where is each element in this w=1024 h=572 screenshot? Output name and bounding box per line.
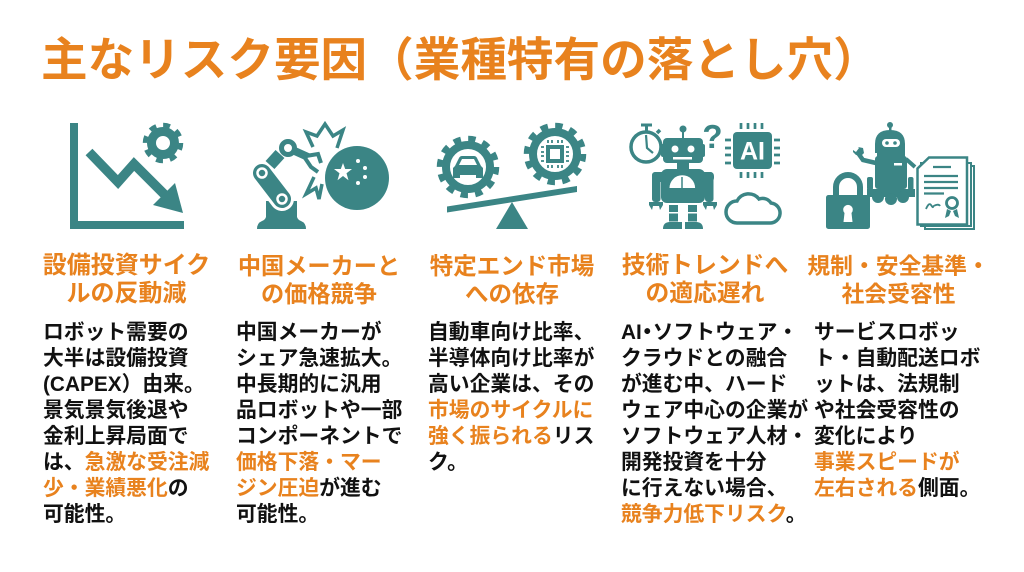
heading: end market dependence (430, 252, 594, 306)
text: capex cycle: 可能性。 (43, 503, 126, 526)
heading: tech trends (622, 252, 788, 306)
text: tech trends: AI・ソフトウェア・ (621, 321, 798, 344)
heading: China makers: の価格競争 (261, 280, 377, 306)
text: end market dependence (428, 320, 594, 474)
text: end market dependence: 高い企業は、その (428, 373, 594, 396)
icon: seesaw with car and chip gears (440, 126, 584, 229)
text: tech trends: 開発投資を十分 (621, 451, 767, 474)
text: regulation: ットは、法規制 (814, 373, 960, 396)
text: capex cycle: ロボット需要の (43, 321, 189, 344)
text: tech trends: クラウドとの融合 (621, 347, 787, 370)
text: regulation: 左右される側面。 (814, 477, 980, 500)
text: capex cycle: は、急激な受注減 (43, 451, 209, 474)
text: regulation: サービスロボッ (814, 321, 960, 344)
text: capex cycle (43, 321, 210, 526)
text: capex cycle: 少・業績悪化の (43, 477, 189, 500)
heading: end market dependence: 特定エンド市場 (430, 252, 594, 278)
text: China makers: 可能性。 (236, 503, 319, 526)
text: capex cycle: (CAPEX）由来。 (43, 373, 205, 396)
text: end market dependence: 市場のサイクルに (428, 399, 593, 422)
heading: end market dependence: への依存 (465, 280, 559, 306)
heading: China makers (238, 252, 400, 306)
text: regulation: ト・自動配送ロボ (814, 347, 980, 370)
text: end market dependence: 自動車向け比率、 (428, 321, 594, 344)
text: China makers (236, 320, 402, 526)
text: end market dependence: ク。 (428, 451, 468, 474)
text: capex cycle: 景気景気後退や (43, 399, 189, 422)
text: China makers: コンポーネントで (236, 425, 402, 448)
text: tech trends (621, 321, 808, 526)
text: tech trends: が進む中、ハード (621, 373, 787, 396)
text: regulation: 事業スピードが (814, 451, 960, 474)
heading: capex cycle: ルの反動減 (66, 280, 186, 306)
heading: China makers: 中国メーカーと (238, 252, 400, 278)
heading: tech trends: 技術トレンドへ (622, 252, 788, 278)
title: 主なリスク要因（業種特有の落とし穴） (41, 34, 880, 86)
heading: regulation: 社会受容性 (842, 280, 955, 306)
text: regulation: 変化により (814, 425, 918, 448)
text: capex cycle: 金利上昇局面で (43, 425, 189, 448)
heading: regulation (807, 252, 990, 306)
text: China makers: 価格下落・マー (236, 451, 382, 474)
text: capex cycle: 大半は設備投資 (43, 347, 189, 370)
icon: robot with timer, AI chip and cloud: ? (702, 118, 723, 155)
text: tech trends: ソフトウェア人材・ (621, 425, 808, 448)
heading: capex cycle (43, 252, 210, 306)
text: end market dependence: 強く振られるリス (428, 425, 594, 448)
text: China makers: 中長期的に汎用 (236, 373, 382, 396)
text: tech trends: 競争力低下リスク。 (621, 503, 807, 526)
text: tech trends: ウェア中心の企業が (621, 399, 808, 422)
text: China makers: シェア急速拡大。 (236, 347, 402, 370)
heading: tech trends: の適応遅れ (646, 280, 764, 306)
icon: robot with timer, AI chip and cloud: AI (740, 138, 765, 166)
text: regulation (814, 320, 980, 500)
icon: robot arm hitting China flag ball (257, 124, 389, 229)
text: end market dependence: 半導体向け比率が (428, 347, 594, 370)
heading: capex cycle: 設備投資サイク (43, 252, 210, 278)
icon: lock, robot and certificate (826, 122, 974, 229)
icon: robot with timer, AI chip and cloud (631, 118, 780, 229)
text: tech trends: に行えない場合、 (621, 477, 787, 500)
heading: regulation: 規制・安全基準・ (807, 252, 990, 278)
icons row (70, 118, 975, 230)
text: regulation: や社会受容性の (814, 399, 960, 422)
icon: falling chart with gear (70, 123, 184, 229)
text: China makers: 中国メーカーが (236, 321, 382, 344)
text: China makers: ジン圧迫が進む (236, 477, 382, 500)
text: China makers: 品ロボットや一部 (236, 399, 402, 422)
